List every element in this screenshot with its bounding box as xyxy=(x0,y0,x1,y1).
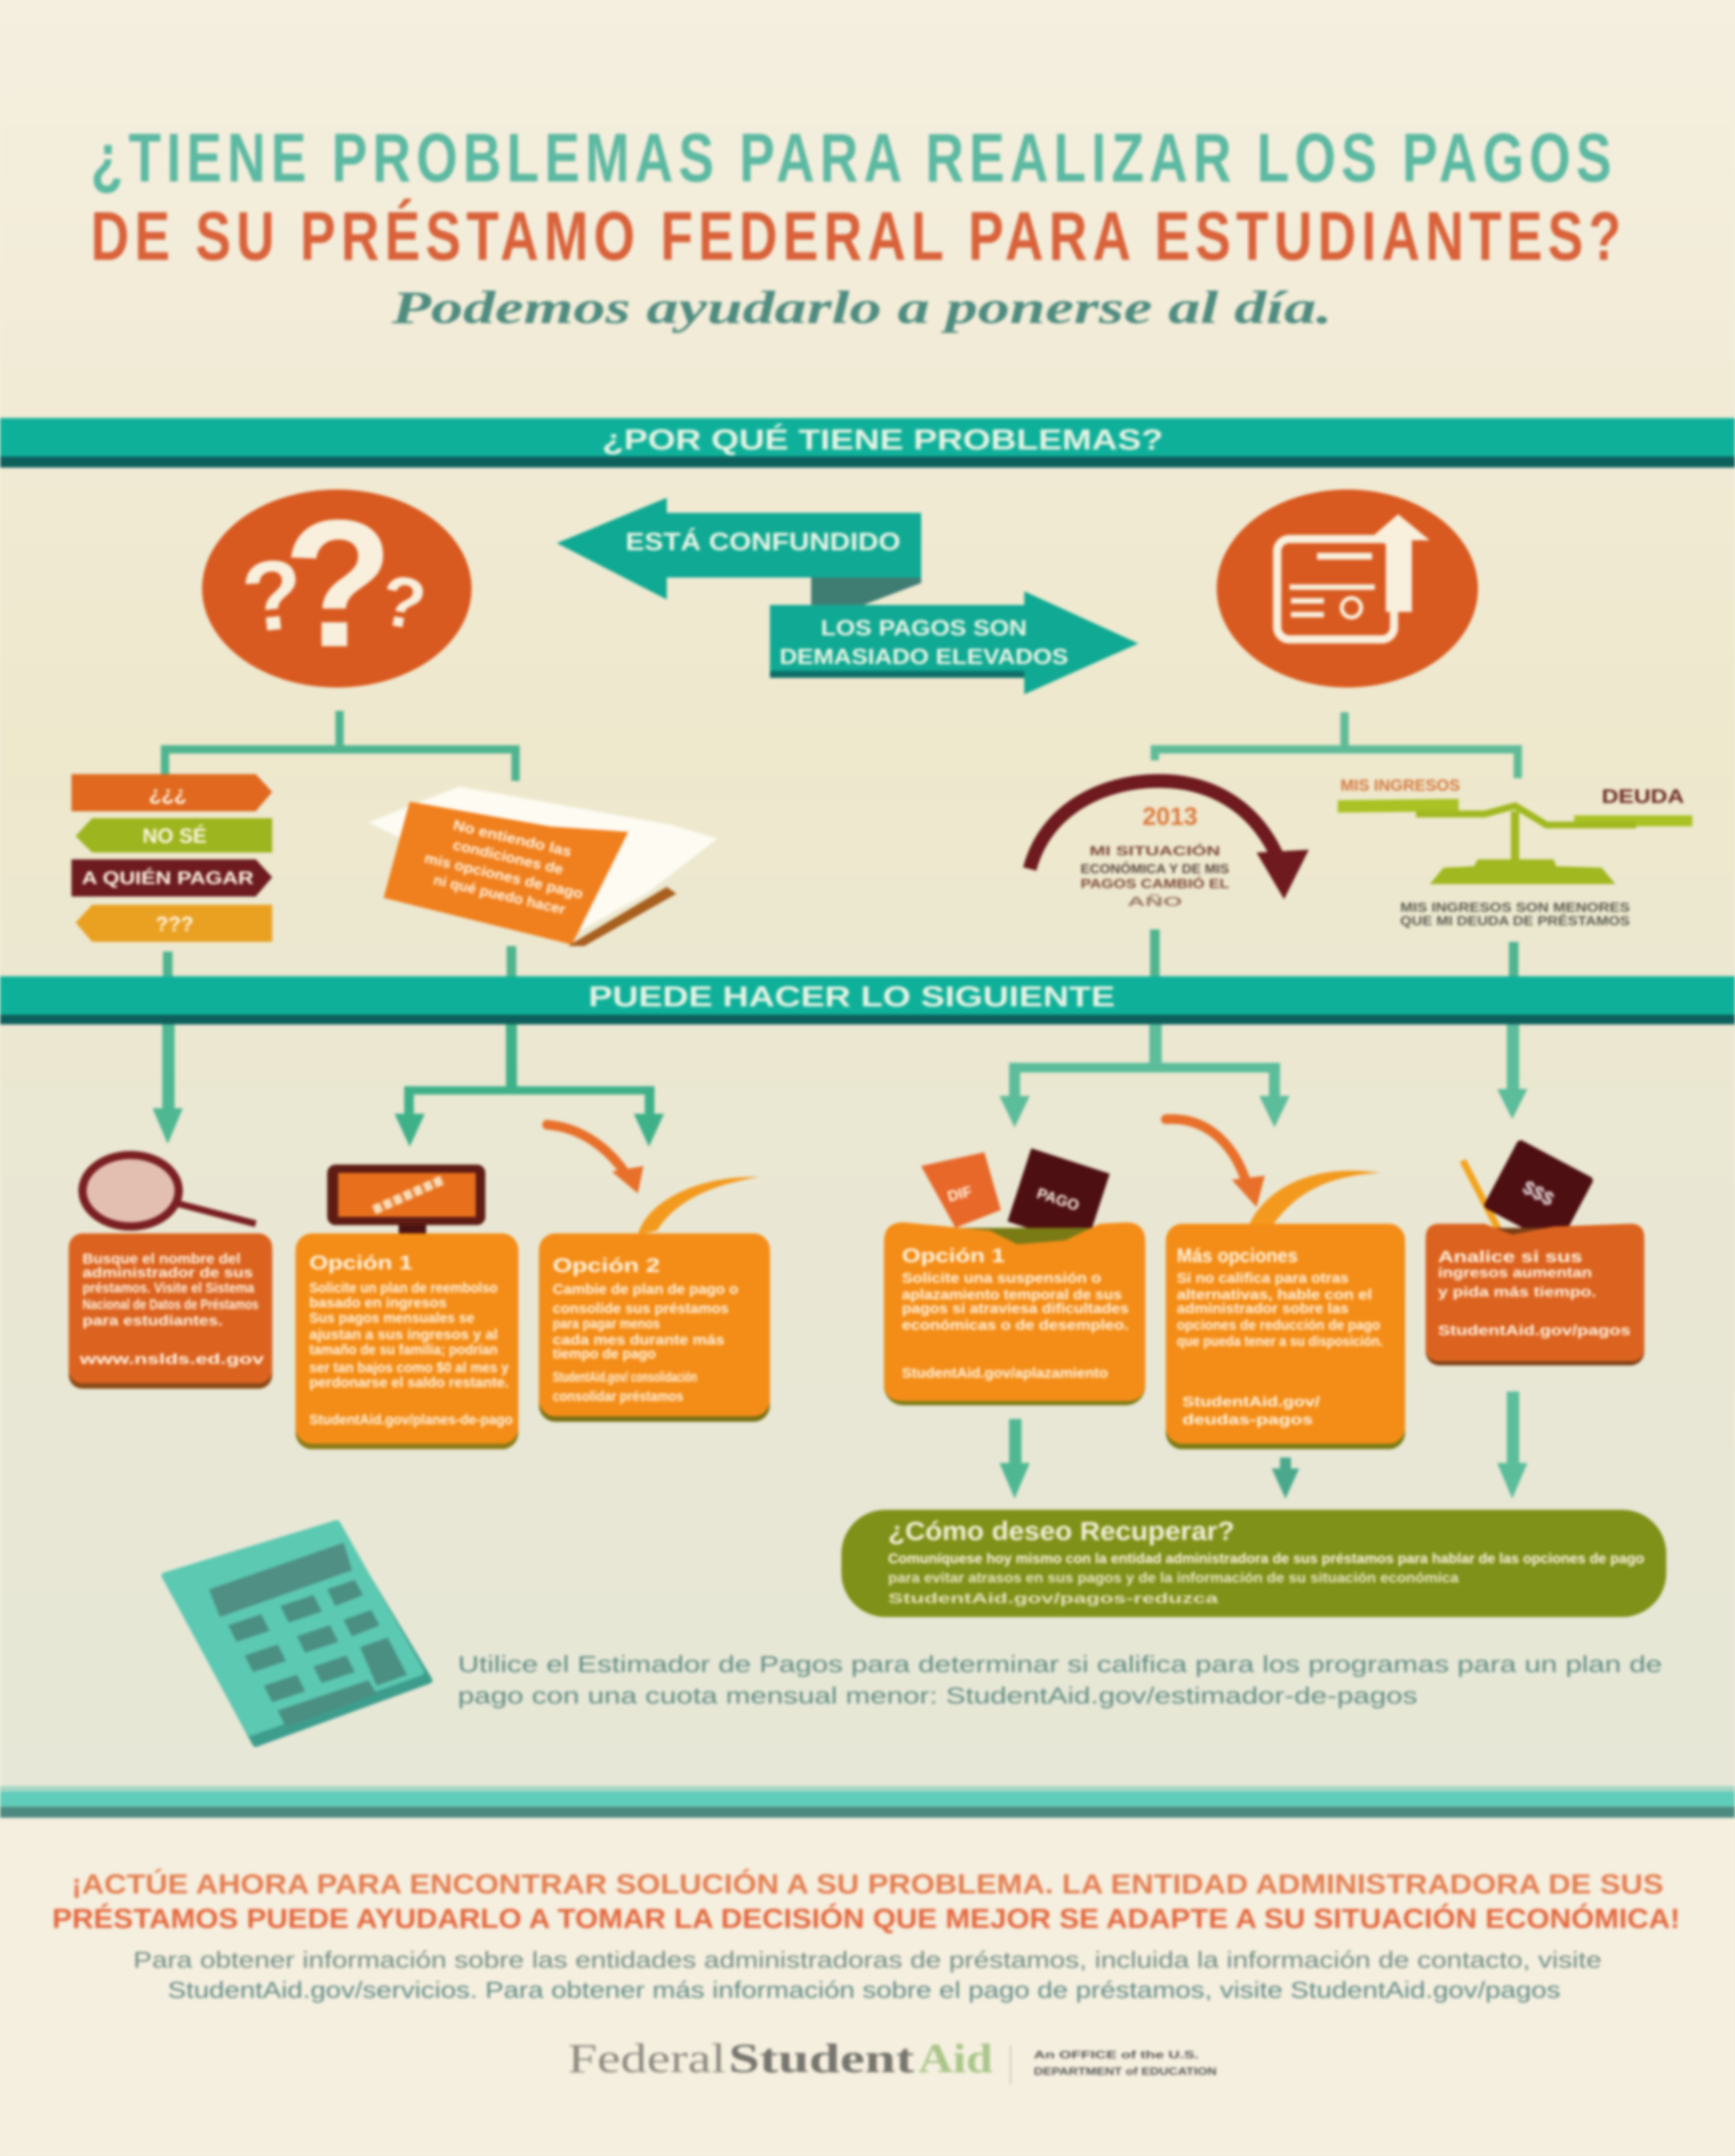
box: right info: ingresos aumentan xyxy=(1438,1265,1592,1281)
box: option 1: Solicite un plan de reembolso xyxy=(310,1279,497,1296)
icon: deferment cards xyxy=(921,1148,1110,1247)
box: right info: StudentAid.gov/pagos xyxy=(1438,1322,1630,1338)
band heading: PUEDE HACER LO SIGUIENTE xyxy=(589,981,1115,1013)
icon: question marks circle xyxy=(202,482,472,687)
box: option 4: opciones de reducción de pago xyxy=(1177,1317,1380,1333)
footer note: Para obtener información sobre las entidades administradoras de préstamos, incluida la información de contacto, visite xyxy=(133,1947,1602,1973)
box: option 2: consolidar préstamos xyxy=(553,1388,683,1404)
box: option 3: Opción 1 xyxy=(902,1246,1005,1267)
curved arrow: orange right xyxy=(1166,1119,1265,1207)
card maroon: PAGO xyxy=(1035,1185,1081,1214)
arrow: confused xyxy=(557,497,921,605)
box: option 4: Si no califica para otras xyxy=(1177,1270,1348,1286)
box: option 4: que pueda tener a su disposición. xyxy=(1177,1333,1383,1350)
box: option 3: Solicite una suspensión o xyxy=(902,1270,1101,1286)
callout: green pill xyxy=(841,1510,1666,1617)
pill heading: ¿Cómo deseo Recuperar? xyxy=(888,1517,1235,1546)
arrow: payments too high: DEMASIADO ELEVADOS xyxy=(779,645,1068,669)
connector stubs above band xyxy=(168,929,1514,979)
text: payment estimator xyxy=(458,1652,1662,1709)
icon: scales: QUE MI DEUDA DE PRÉSTAMOS xyxy=(1400,913,1630,929)
box: option 2 xyxy=(539,1233,770,1422)
arrow: option 3 to recertify xyxy=(1000,1419,1030,1499)
band: what you can do xyxy=(0,976,1735,1025)
box: find your servicer: www.nslds.ed.gov xyxy=(79,1351,264,1367)
box: option 1: tamaño de su familia; podrían xyxy=(310,1342,497,1358)
box: option 4 xyxy=(1166,1224,1405,1449)
box: find your servicer: préstamos. Visite el Sistema xyxy=(82,1279,254,1296)
logo: federal student aid: Aid xyxy=(919,2036,993,2082)
footer note xyxy=(133,1947,1602,2003)
callout: green pill: para evitar atrasos en sus pagos y de la información de su situación económica xyxy=(888,1570,1459,1586)
folder: options text: No entiendo las xyxy=(451,817,573,860)
logo: federal student aid: DEPARTMENT of EDUCATION xyxy=(1034,2066,1217,2078)
box: option 4: Más opciones xyxy=(1177,1246,1298,1267)
icon: monitor xyxy=(327,1165,485,1243)
box: option 2: cada mes durante más xyxy=(553,1332,725,1348)
callout: green pill: StudentAid.gov/pagos-reduzca xyxy=(888,1590,1218,1607)
folder: options text: ni qué puedo hacer xyxy=(432,872,567,918)
folder: options text xyxy=(368,787,718,946)
title xyxy=(91,120,1626,333)
icon: question marks circle: ? xyxy=(283,482,393,685)
box: find your servicer: Busque el nombre del xyxy=(82,1251,241,1267)
box: option 1: Sus pagos mensuales se xyxy=(310,1310,474,1326)
box: option 1: ser tan bajos como $0 al mes y xyxy=(310,1359,509,1375)
arrow: confused: ESTÁ CONFUNDIDO xyxy=(626,528,900,556)
box: option 2: tiempo de pago xyxy=(553,1346,656,1362)
box: option 4: StudentAid.gov/ xyxy=(1182,1394,1320,1410)
box: option 2: Cambie de plan de pago o xyxy=(553,1281,738,1297)
band: why problems xyxy=(0,418,1735,468)
box: find your servicer: Nacional de Datos de Préstamos xyxy=(82,1296,258,1313)
icon: maroon card with ruler: $$$ xyxy=(1519,1177,1557,1210)
arrow: payments too high xyxy=(770,591,1138,694)
card maroon xyxy=(1008,1148,1110,1247)
box: option 1: Opción 1 xyxy=(310,1252,412,1274)
icon: calculator xyxy=(165,1523,429,1744)
icon: payment change arc: PAGOS CAMBIÓ EL xyxy=(1081,875,1229,891)
arrow: to right box xyxy=(1497,1025,1528,1119)
icon: scales: DEUDA xyxy=(1602,786,1684,808)
footer call to action xyxy=(52,1868,1680,1934)
box: option 1: basado en ingresos xyxy=(310,1295,447,1311)
box: find your servicer: para estudiantes. xyxy=(82,1313,223,1329)
signpost banners xyxy=(72,774,272,942)
box: option 1: perdonarse el saldo restante. xyxy=(310,1375,509,1391)
box: option 2: consolide sus préstamos xyxy=(553,1300,729,1317)
footer call to action: PRÉSTAMOS PUEDE AYUDARLO A TOMAR LA DECISIÓN QUE MEJOR SE ADAPTE A SU SITUACIÓN ECONÓMICA! xyxy=(52,1903,1680,1934)
connector: right tree xyxy=(1155,712,1518,778)
arrows: to options 3 and 4 xyxy=(1000,1025,1290,1127)
band: footer rule xyxy=(0,1786,1735,1818)
box: option 4: deudas-pagos xyxy=(1182,1412,1313,1428)
logo: federal student aid: An OFFICE of the U.S. xyxy=(1034,2050,1199,2061)
box: option 4: alternativas, hable con el xyxy=(1177,1287,1372,1303)
box: option 2: StudentAid.gov/ consolidación xyxy=(553,1369,697,1386)
signpost banners: A QUIÉN PAGAR xyxy=(82,868,253,888)
connector: left tree xyxy=(165,711,516,781)
box: right info xyxy=(1425,1224,1644,1365)
banner 4 xyxy=(76,905,272,942)
band heading: ¿POR QUÉ TIENE PROBLEMAS? xyxy=(602,424,1163,456)
box: option 3: StudentAid.gov/aplazamiento xyxy=(902,1365,1108,1381)
banner 3 xyxy=(72,860,272,896)
text: payment estimator: pago con una cuota mensual menor: StudentAid.gov/estimador-de-pagos xyxy=(458,1684,1417,1709)
icon: scales: MIS INGRESOS xyxy=(1340,777,1460,795)
icon: payment change arc: MI SITUACIÓN xyxy=(1090,842,1220,858)
folder: options text: mis opciones de pago xyxy=(423,850,585,902)
text: payment estimator: Utilice el Estimador de Pagos para determinar si califica para los programas para un plan de xyxy=(458,1652,1662,1677)
icon: bill with rising arrow circle xyxy=(1217,489,1478,687)
signpost banners: ??? xyxy=(155,912,193,935)
arrow: to lookup box xyxy=(153,1025,183,1144)
footer call to action: ¡ACTÚE AHORA PARA ENCONTRAR SOLUCIÓN A SU PROBLEMA. LA ENTIDAD ADMINISTRADORA DE SUS xyxy=(72,1868,1663,1899)
icon: payment change arc: 2013 xyxy=(1142,803,1198,831)
box: right info: y pida más tiempo. xyxy=(1438,1283,1596,1300)
signpost banners: NO SÉ xyxy=(143,824,207,848)
arrow: option 4 to recertify xyxy=(1272,1458,1299,1499)
subtitle: Podemos ayudarlo a ponerse al día. xyxy=(391,281,1332,333)
box: option 4: administrador sobre las xyxy=(1177,1300,1348,1317)
icon: question marks circle: ? xyxy=(375,560,432,645)
box: find your servicer xyxy=(69,1233,272,1389)
logo: federal student aid: Student xyxy=(729,2036,915,2082)
box: find your servicer: administrador de sus xyxy=(82,1265,253,1281)
card orange label: DIF xyxy=(946,1183,973,1205)
icon: scales xyxy=(1338,777,1692,929)
icon: payment change arc xyxy=(1030,781,1309,910)
icon: question marks circle: ? xyxy=(237,537,309,654)
icon: maroon card with ruler xyxy=(1463,1139,1594,1247)
banner 1 xyxy=(72,774,272,811)
icon: scales: MIS INGRESOS SON MENORES xyxy=(1400,901,1630,915)
box: option 2: para pagar menos xyxy=(553,1315,660,1331)
arrow: payments too high: LOS PAGOS SON xyxy=(821,616,1027,640)
box: option 2: Opción 2 xyxy=(553,1255,660,1277)
curved arrow: amber right xyxy=(1248,1171,1380,1227)
box: right info: Analice si sus xyxy=(1438,1248,1582,1267)
icon: magnifier xyxy=(82,1155,255,1227)
banner 2 xyxy=(76,818,272,852)
pill text: Comuníquese hoy mismo con la entidad administradora de sus préstamos para hablar de las opciones de pago xyxy=(888,1550,1644,1567)
logo: federal student aid xyxy=(568,2036,1217,2084)
folder: options text: condiciones de xyxy=(451,837,565,878)
icon: payment change arc: AÑO xyxy=(1127,894,1182,910)
box: option 1: StudentAid.gov/planes-de-pago xyxy=(310,1412,513,1428)
box: option 3: aplazamiento temporal de sus xyxy=(902,1287,1122,1303)
curved arrow: amber left xyxy=(638,1177,759,1235)
icon: payment change arc: ECONÓMICA Y DE MIS xyxy=(1081,860,1229,877)
box: option 1: ajustan a sus ingresos y al xyxy=(310,1327,497,1343)
arrows: to options 1 and 2 xyxy=(395,1025,664,1147)
logo: federal student aid: Federal xyxy=(568,2036,726,2082)
box: option 3: económicas o de desempleo. xyxy=(902,1317,1129,1333)
arrow: right box to recertify xyxy=(1497,1392,1528,1499)
footer note: StudentAid.gov/servicios. Para obtener más información sobre el pago de préstamos, visite StudentAid.gov/pagos xyxy=(168,1978,1561,2003)
signpost banners: ¿¿¿ xyxy=(149,782,187,805)
curved arrow: orange left xyxy=(547,1125,643,1194)
card orange xyxy=(921,1152,1001,1228)
box: option 3: pagos si atraviesa dificultades xyxy=(902,1300,1129,1317)
box: option 3 xyxy=(884,1223,1145,1405)
box: option 1 xyxy=(295,1233,518,1449)
